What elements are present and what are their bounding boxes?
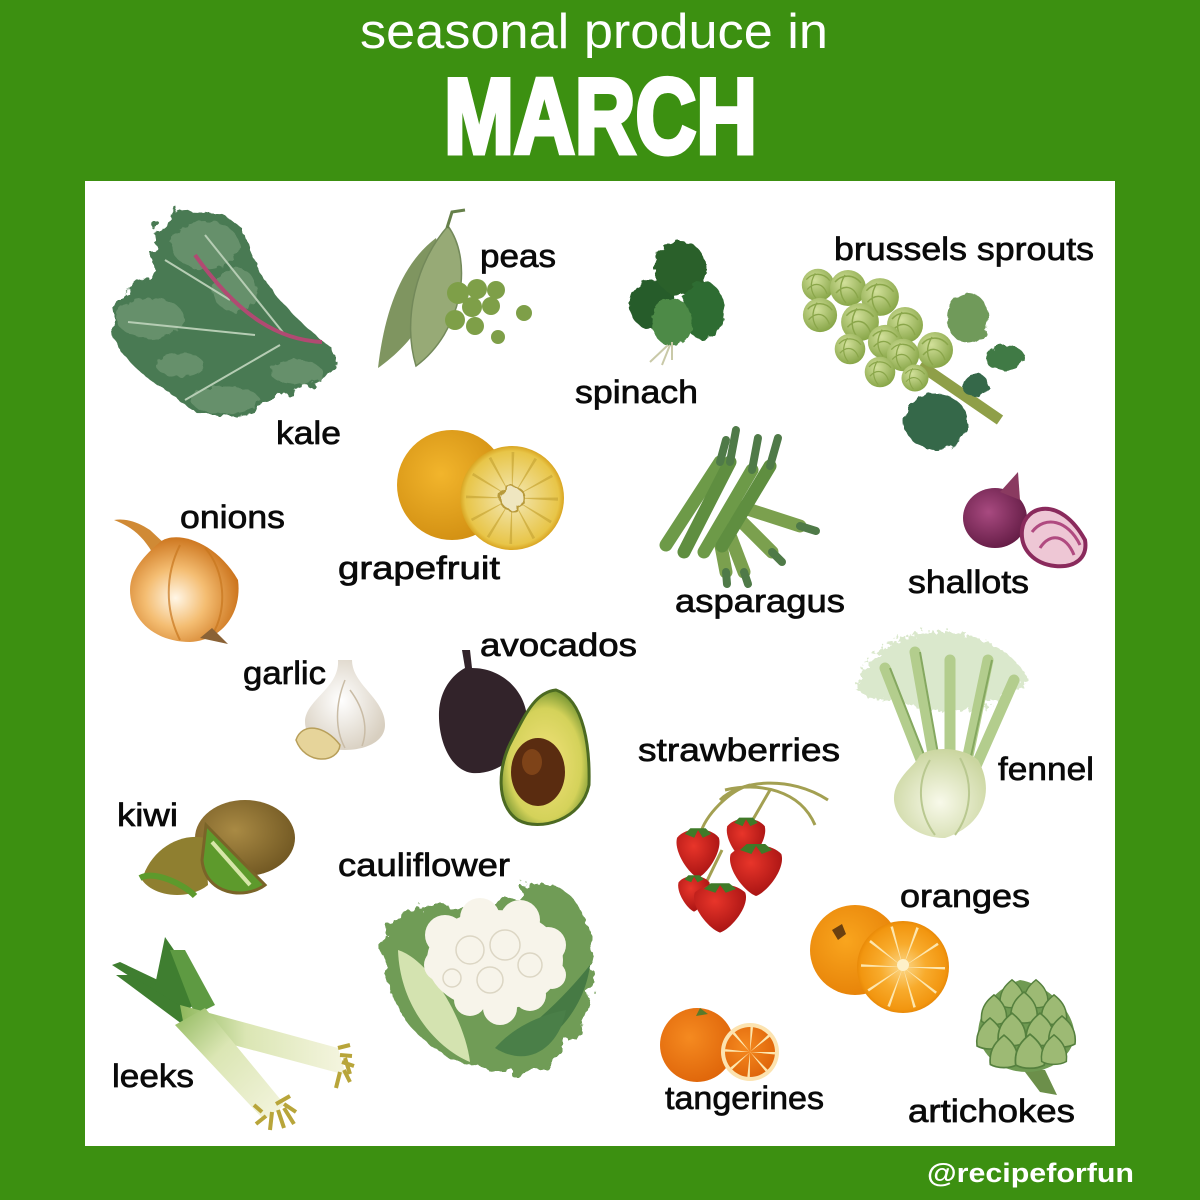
panel: produce list [85, 181, 1115, 1146]
label: grapefruit: grapefruit [338, 550, 500, 586]
label: peas: peas [480, 238, 556, 274]
icon: avocados [439, 650, 589, 825]
icon: oranges [810, 905, 949, 1013]
title: seasonal produce in: seasonal produce in [360, 5, 828, 59]
icon: grapefruit [397, 430, 564, 550]
label: fennel: fennel [998, 751, 1094, 787]
label: cauliflower: cauliflower [338, 847, 510, 883]
title: MARCH: MARCH [444, 56, 757, 176]
icon: leeks [112, 937, 354, 1130]
label: kale: kale [276, 415, 341, 451]
icon: peas [378, 210, 532, 368]
label: spinach: spinach [575, 374, 698, 410]
icon: onion [114, 519, 239, 644]
icon: spinach [630, 241, 724, 365]
icon: kale [112, 211, 336, 417]
label: onions: onions [180, 499, 285, 535]
icon: garlic [296, 660, 385, 759]
label: brussels sprouts: brussels sprouts [834, 231, 1094, 267]
label: avocados: avocados [480, 627, 637, 663]
icon: artichoke [977, 980, 1075, 1095]
label: artichokes: artichokes [908, 1093, 1075, 1129]
icon: tangerines [660, 1008, 779, 1082]
label: shallots: shallots [908, 564, 1029, 600]
icon: asparagus [666, 430, 816, 584]
label: leeks: leeks [112, 1058, 194, 1094]
label: asparagus: asparagus [675, 583, 845, 619]
icon: fennel [856, 631, 1028, 838]
icon: shallots [963, 472, 1085, 566]
label: tangerines: tangerines [665, 1080, 824, 1116]
label: strawberries: strawberries [638, 732, 840, 768]
label: garlic: garlic [243, 655, 326, 691]
icon: brussels sprouts [802, 269, 1025, 450]
label: kiwi: kiwi [117, 797, 178, 833]
icon: strawberries [677, 783, 828, 933]
credit: @recipeforfun: @recipeforfun [927, 1158, 1134, 1188]
label: oranges: oranges [900, 878, 1030, 914]
icon: kiwi [140, 800, 295, 896]
icon: cauliflower [382, 883, 594, 1072]
